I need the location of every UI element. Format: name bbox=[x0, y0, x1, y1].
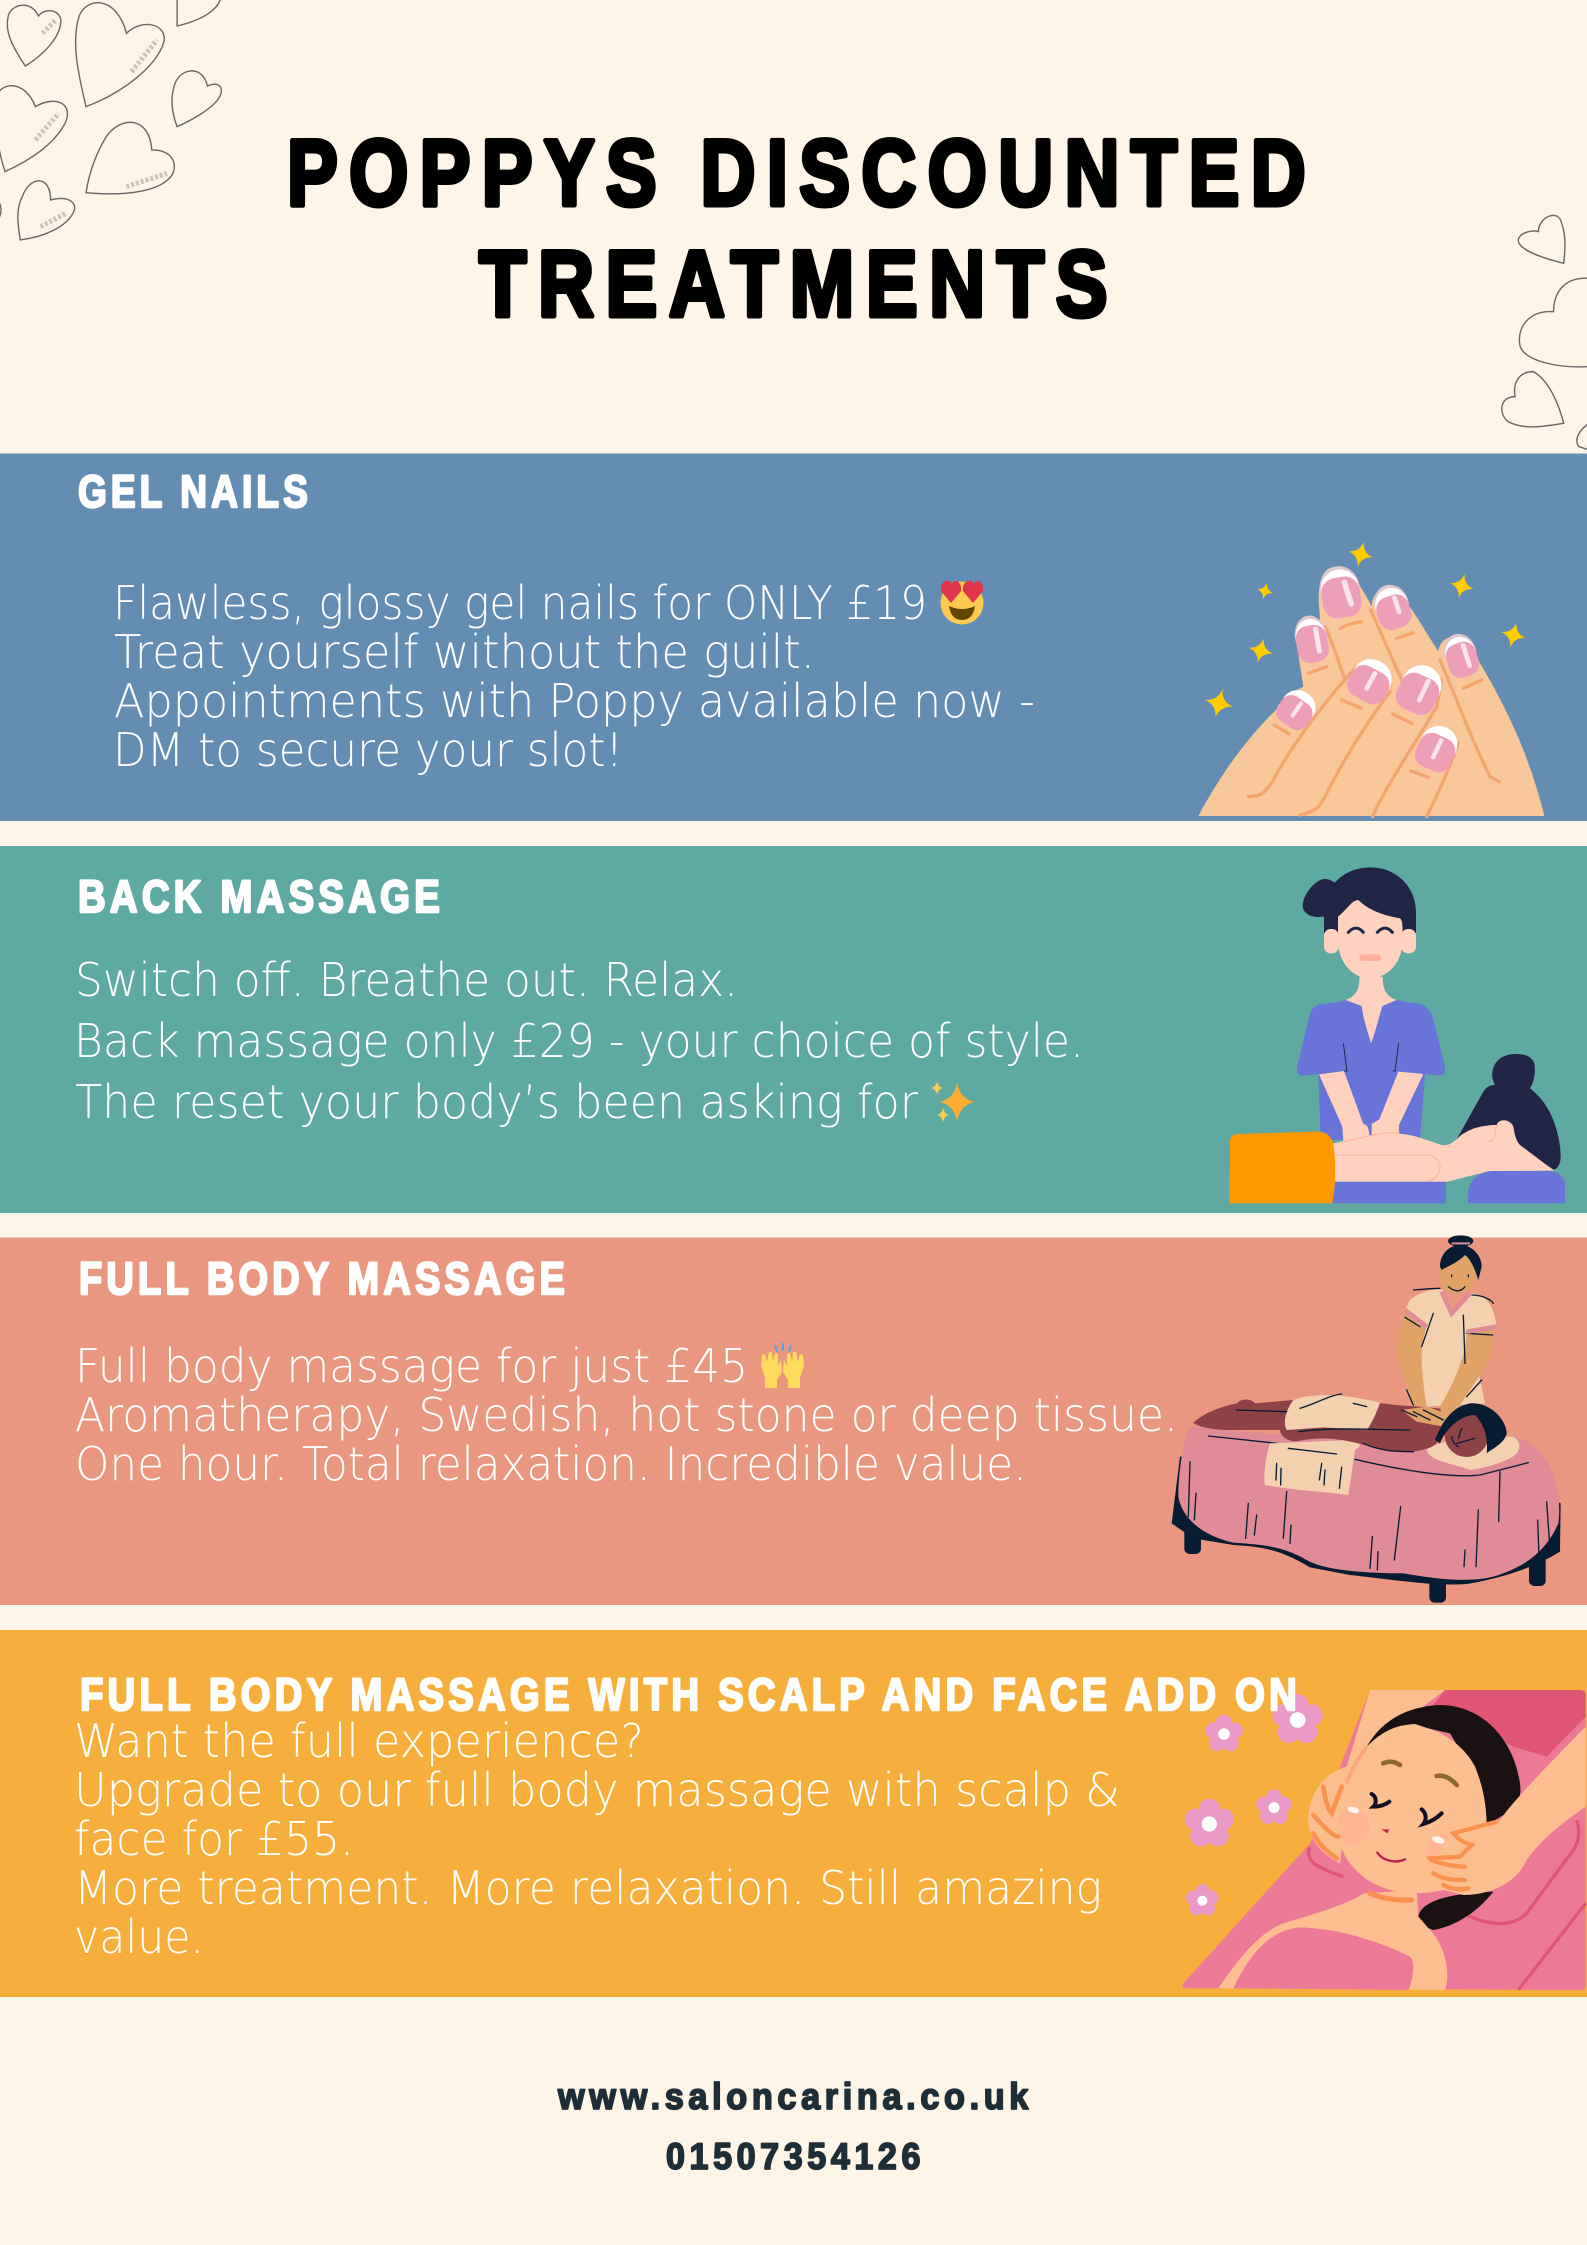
text: add-on offer: face for £55. bbox=[74, 1812, 354, 1866]
text: add-on offer: More treatment. More relaxation. Still amazing bbox=[74, 1861, 1102, 1915]
heading: back massage: BACK MASSAGE bbox=[78, 871, 444, 922]
decorative hearts top right bbox=[1502, 215, 1587, 450]
text: full body massage offer bbox=[75, 1339, 1178, 1491]
heading: gel nails: GEL NAILS bbox=[78, 466, 312, 517]
text: back massage offer: The reset your body’s been asking for bbox=[75, 1075, 918, 1129]
footer: website and phone bbox=[557, 2076, 1033, 2177]
text: back massage offer bbox=[74, 953, 1084, 1129]
panel: full body massage bbox=[0, 1235, 1587, 1605]
text: full body massage offer: Full body massage for just £45 bbox=[75, 1339, 748, 1393]
icon: raised hands emoji bbox=[761, 1343, 804, 1388]
heading: full body massage: FULL BODY MASSAGE bbox=[79, 1253, 569, 1304]
text: gel nails offer: Appointments with Poppy available now - bbox=[114, 674, 1035, 728]
text: add-on offer: value. bbox=[74, 1910, 204, 1964]
text: gel nails offer: DM to secure your slot! bbox=[113, 723, 623, 777]
panel: back massage bbox=[0, 846, 1587, 1213]
text: gel nails offer bbox=[113, 576, 1035, 777]
text: back massage offer: Switch off. Breathe out. Relax. bbox=[75, 953, 738, 1007]
illustration: therapist massaging client's back bbox=[1229, 867, 1565, 1203]
illustration: masseuse and client on table bbox=[1172, 1235, 1561, 1603]
footer: website and phone: www.saloncarina.co.uk bbox=[557, 2076, 1033, 2117]
text: gel nails offer: Treat yourself without the guilt. bbox=[114, 625, 815, 679]
heading: full body massage with scalp and face add on: FULL BODY MASSAGE WITH SCALP AND FACE ADD ON bbox=[80, 1669, 1301, 1720]
text: gel nails offer: Flawless, glossy gel nails for ONLY £19 bbox=[113, 576, 927, 630]
panel: gel nails bbox=[0, 454, 1587, 821]
title bbox=[287, 120, 1317, 336]
title: POPPYS DISCOUNTED bbox=[287, 120, 1317, 225]
text: back massage offer: Back massage only £29 - your choice of style. bbox=[74, 1014, 1084, 1068]
panel: full body massage with scalp and face bbox=[0, 1630, 1587, 1997]
text: add-on offer: Want the full experience? bbox=[74, 1714, 644, 1768]
title: TREATMENTS bbox=[479, 231, 1119, 336]
text: full body massage offer: One hour. Total relaxation. Incredible value. bbox=[75, 1437, 1027, 1491]
icon: sparkles emoji bbox=[931, 1081, 975, 1123]
text: full body massage offer: Aromatherapy, Swedish, hot stone or deep tissue. bbox=[75, 1388, 1178, 1442]
footer: website and phone: 01507354126 bbox=[666, 2136, 925, 2177]
decorative hearts top left bbox=[0, 0, 221, 240]
illustration: facial treatment with flowers bbox=[1182, 1690, 1586, 1990]
illustration: manicured hands with sparkles bbox=[1198, 539, 1544, 817]
icon: heart eyes emoji bbox=[940, 581, 984, 624]
text: add-on offer bbox=[74, 1714, 1120, 1964]
text: add-on offer: Upgrade to our full body massage with scalp & bbox=[74, 1763, 1120, 1817]
